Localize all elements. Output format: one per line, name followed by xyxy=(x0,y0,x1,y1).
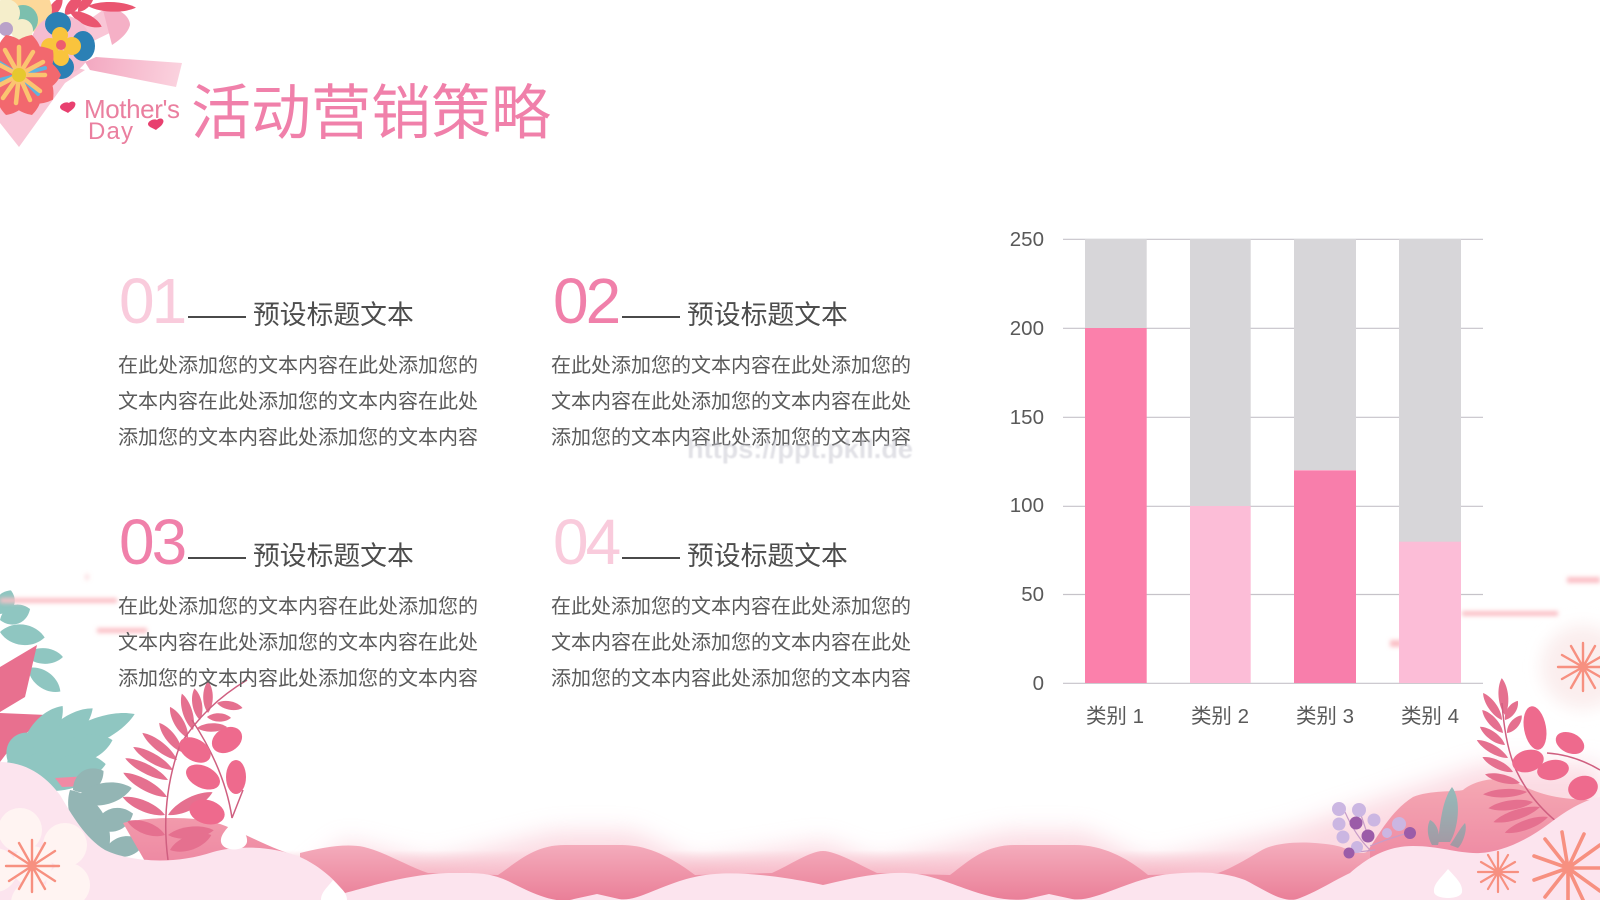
bar: 类别 2 xyxy=(1190,239,1251,683)
y axis labels: 200 xyxy=(1010,317,1044,340)
y axis labels: 50 xyxy=(1021,583,1044,606)
soft streaks xyxy=(0,574,1600,647)
x axis labels: 类别 2 xyxy=(1191,705,1249,728)
left fern xyxy=(121,680,247,860)
mother's day lettering: Day xyxy=(88,118,133,145)
bar: 类别 3 xyxy=(1294,239,1356,683)
body text 02: 在此处添加您的文本内容在此处添加您的 xyxy=(551,355,911,377)
body text 04: 添加您的文本内容此处添加您的文本内容 xyxy=(551,668,911,690)
body text 01: 在此处添加您的文本内容在此处添加您的 xyxy=(118,355,478,377)
cream foreground wave xyxy=(0,762,1600,900)
left blossom xyxy=(0,808,90,900)
body text 02: 添加您的文本内容此处添加您的文本内容 xyxy=(551,427,911,449)
heading 03: 预设标题文本 xyxy=(253,541,414,571)
y axis labels: 150 xyxy=(1010,406,1044,429)
body text 03 xyxy=(118,596,478,690)
heading 01: 预设标题文本 xyxy=(253,300,414,330)
corner bouquet xyxy=(0,0,182,147)
body text 03: 文本内容在此处添加您的文本内容在此处 xyxy=(118,632,478,654)
panel: item 03 xyxy=(118,506,478,690)
pink glow above waves xyxy=(240,765,1600,900)
x axis labels xyxy=(1086,705,1459,728)
heading 04: 预设标题文本 xyxy=(687,541,848,571)
number 01: 01 xyxy=(119,265,184,337)
body text 04 xyxy=(551,596,911,690)
x axis labels: 类别 4 xyxy=(1401,705,1459,728)
panel: item 01 xyxy=(118,265,478,449)
x axis labels: 类别 1 xyxy=(1086,705,1144,728)
y axis labels xyxy=(1010,228,1044,695)
heading 02: 预设标题文本 xyxy=(687,300,848,330)
dash xyxy=(622,316,680,318)
left teal and pink foliage xyxy=(0,587,146,860)
watermark: https://ppt.pkll.de xyxy=(687,434,913,464)
body text 04: 文本内容在此处添加您的文本内容在此处 xyxy=(551,632,911,654)
right fern xyxy=(1475,678,1600,837)
number 02: 02 xyxy=(553,265,618,337)
body text 01: 文本内容在此处添加您的文本内容在此处 xyxy=(118,391,478,413)
panel: item 04 xyxy=(551,506,911,690)
bottom right spoke flowers xyxy=(1478,832,1600,900)
dash xyxy=(188,557,246,559)
right teal plant xyxy=(1428,787,1466,848)
body text 01: 添加您的文本内容此处添加您的文本内容 xyxy=(118,427,478,449)
x axis labels: 类别 3 xyxy=(1296,705,1354,728)
body text 03: 在此处添加您的文本内容在此处添加您的 xyxy=(118,596,478,618)
mother's day lettering: Mother's xyxy=(84,94,180,124)
title: 活动营销策略 xyxy=(191,80,551,147)
y axis labels: 250 xyxy=(1010,228,1044,251)
body text 01 xyxy=(118,354,478,449)
body text 02 xyxy=(551,354,911,449)
body text 03: 添加您的文本内容此处添加您的文本内容 xyxy=(118,668,478,690)
purple flowers xyxy=(1332,802,1416,858)
panel: item 02 xyxy=(551,265,911,449)
y axis labels: 0 xyxy=(1033,672,1044,695)
number 04: 04 xyxy=(553,506,618,578)
white drops xyxy=(221,820,1462,900)
y axis labels: 100 xyxy=(1010,494,1044,517)
dash xyxy=(188,316,246,318)
bar: 类别 1 xyxy=(1085,239,1147,683)
bar: 类别 4 xyxy=(1399,239,1461,683)
pale right blossom xyxy=(1541,625,1600,709)
dash xyxy=(622,557,680,559)
body text 02: 文本内容在此处添加您的文本内容在此处 xyxy=(551,391,911,413)
mother's day lettering xyxy=(60,94,180,145)
body text 04: 在此处添加您的文本内容在此处添加您的 xyxy=(551,596,911,618)
number 03: 03 xyxy=(119,506,184,578)
back pink hills xyxy=(123,779,1600,900)
